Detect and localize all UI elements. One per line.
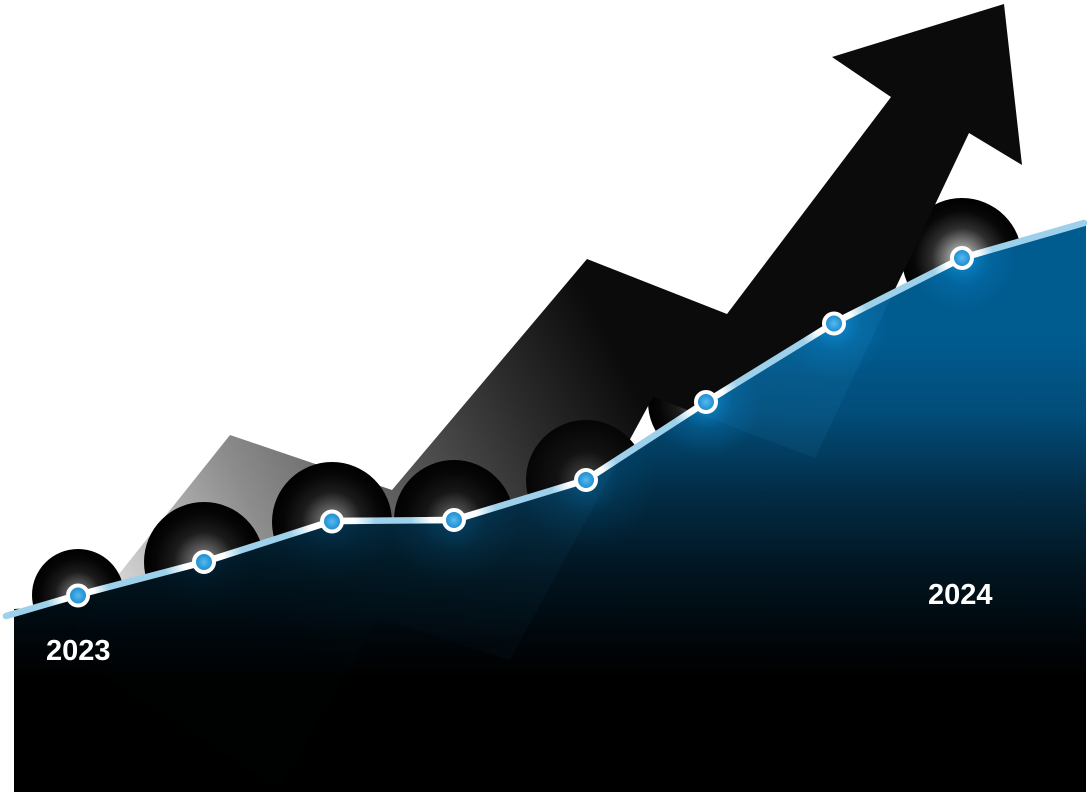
trend line [6,223,1084,616]
label: 2023: 2023 [46,635,111,667]
arrow seen through the area [186,250,1002,582]
foreground spheres over the arrow [32,420,646,641]
label: 2024: 2024 [928,579,993,611]
data point markers [68,248,972,606]
background spheres behind the arrow [648,198,1022,460]
blue gradient area under the line [14,226,1086,792]
